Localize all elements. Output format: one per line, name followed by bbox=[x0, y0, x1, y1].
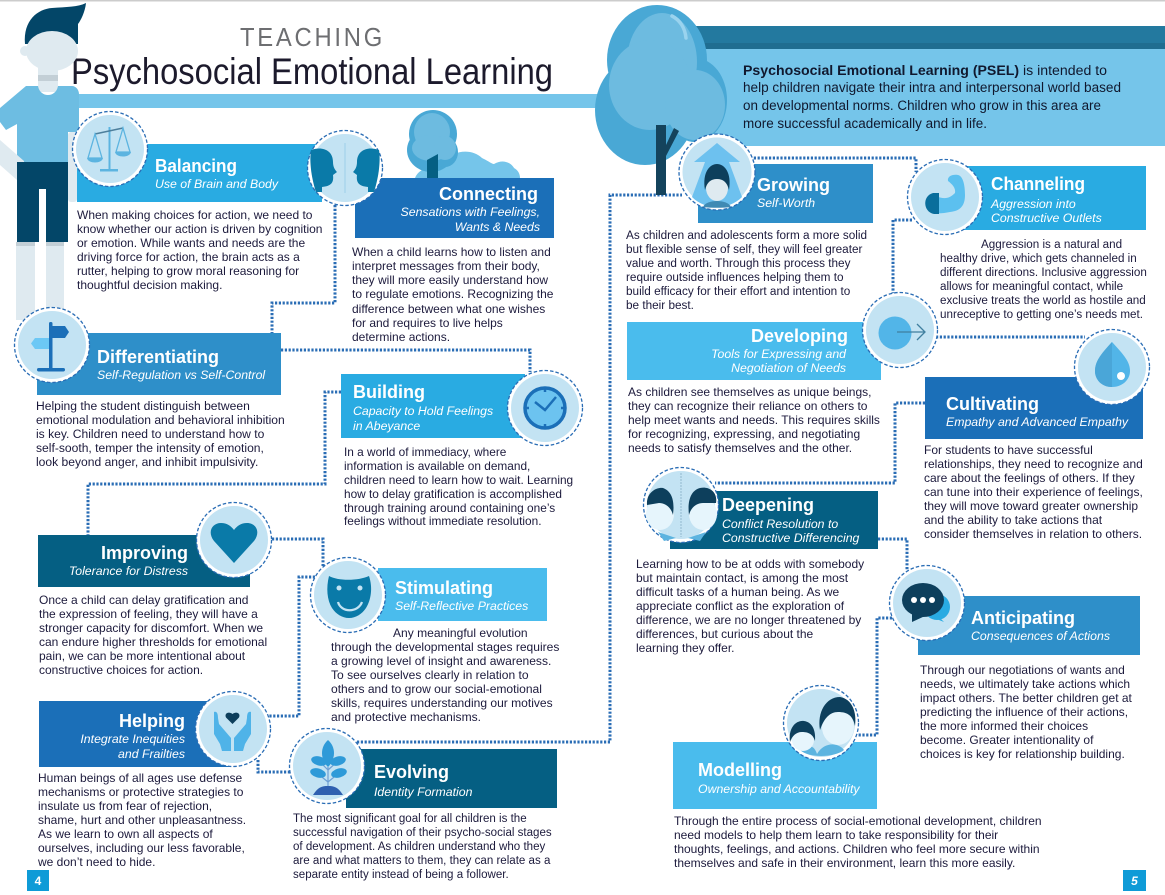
text block: Human beings of all ages use defense bbox=[38, 771, 242, 785]
text block: Helping the student distinguish between bbox=[36, 399, 250, 413]
subheading: Self-Regulation vs Self-Control bbox=[97, 368, 266, 382]
text block: exclusive treats the world as hostile and bbox=[940, 294, 1146, 307]
icon: water drop bbox=[1074, 330, 1150, 404]
text block: different directions. Inclusive aggression bbox=[940, 266, 1147, 279]
icon: flexed arm bbox=[908, 160, 982, 234]
text block: are and what matters to them, they can relate as a bbox=[293, 855, 551, 867]
connector lines bbox=[88, 158, 1085, 772]
text block: and protective mechanisms. bbox=[331, 710, 481, 724]
text block: stronger capacity for discomfort. When we bbox=[39, 621, 263, 635]
icon: signpost bbox=[14, 308, 90, 382]
heading: Improving bbox=[101, 543, 188, 563]
text block: through training around containing one’s bbox=[344, 501, 555, 515]
text block: Aggression is a natural and bbox=[981, 238, 1122, 251]
text block: insulate us from fear of rejection, bbox=[38, 799, 212, 813]
heading: Anticipating bbox=[971, 608, 1075, 628]
text block: To see ourselves clearly in relation to bbox=[331, 668, 529, 682]
text block: pain, we can be more intentional about bbox=[39, 649, 246, 663]
text block: to regulate emotions. Recognizing the bbox=[352, 287, 554, 301]
section: Stimulating bbox=[310, 558, 559, 724]
text block: learning they offer. bbox=[636, 641, 735, 655]
text block: shame, hurt and other unpleasantness. bbox=[38, 813, 246, 827]
subheading: Ownership and Accountability bbox=[698, 782, 860, 796]
text block: help meet wants and needs. This requires skills bbox=[628, 413, 880, 427]
text block: needs, we ultimately take actions which bbox=[920, 677, 1130, 691]
subheading: Integrate Inequities bbox=[80, 732, 185, 746]
icon: parent and child bbox=[784, 686, 858, 760]
heading: Balancing bbox=[155, 156, 237, 176]
text block: and the ability to take actions that bbox=[924, 513, 1103, 527]
subheading: Constructive Outlets bbox=[991, 211, 1102, 225]
icon: circle with arrow bbox=[862, 292, 938, 368]
icon: boy with upward arrow bbox=[679, 134, 755, 210]
icon: smiling mask bbox=[310, 558, 386, 632]
text block: Any meaningful evolution bbox=[393, 626, 528, 640]
subheading: Use of Brain and Body bbox=[155, 177, 279, 191]
title: TEACHING bbox=[240, 22, 385, 52]
icon: heart bbox=[196, 502, 272, 578]
section: Differentiating bbox=[14, 308, 285, 469]
text block: they will move toward greater ownership bbox=[924, 499, 1138, 513]
text block: emotional modulation and behavioral inhibition bbox=[36, 413, 285, 427]
text block: how to delay gratification is accomplished bbox=[344, 487, 562, 501]
text block: The most significant goal for all children is the bbox=[293, 813, 527, 825]
heading: Evolving bbox=[374, 762, 449, 782]
subheading: Sensations with Feelings, bbox=[401, 205, 540, 219]
text block: As we learn to own all aspects of bbox=[38, 827, 213, 841]
text block: separate entity instead of being a follower. bbox=[293, 869, 509, 881]
text block: children need to learn how to wait. Learning bbox=[344, 473, 573, 487]
subheading: Aggression into bbox=[990, 197, 1076, 211]
text block: information is available on demand, bbox=[344, 459, 530, 473]
text block: When making choices for action, we need to bbox=[77, 208, 313, 222]
icon: scales bbox=[72, 112, 148, 186]
text block: feelings without immediate resolution. bbox=[344, 514, 542, 528]
text block: successful navigation of their psycho-social stages bbox=[293, 827, 552, 839]
heading: Stimulating bbox=[395, 578, 493, 598]
section: Cultivating bbox=[924, 330, 1150, 541]
page number 5 bbox=[1123, 870, 1146, 891]
text block: the more informed their choices bbox=[920, 719, 1088, 733]
subheading: and Frailties bbox=[118, 747, 185, 761]
page number 4: 4 bbox=[35, 874, 42, 888]
text block: build efficacy for their effort and intention to bbox=[626, 285, 851, 298]
section: Helping bbox=[37, 692, 270, 869]
icon: speech bubbles bbox=[890, 566, 964, 640]
text block: a growing level of insight and awareness. bbox=[331, 654, 551, 668]
text block: Through the entire process of social-emotional development, children bbox=[674, 814, 1042, 828]
text block: In a world of immediacy, where bbox=[344, 445, 507, 459]
text block: thoughtful decision making. bbox=[77, 278, 222, 292]
text block: Once a child can delay gratification and bbox=[39, 593, 248, 607]
text block: know whether our action is driven by cognition bbox=[77, 222, 322, 236]
intro panel: PSEL: more successful academically and in life. bbox=[743, 116, 987, 131]
section: Deepening bbox=[636, 468, 878, 655]
heading: Modelling bbox=[698, 760, 782, 780]
subheading: Tools for Expressing and bbox=[711, 347, 847, 361]
text block: self-sooth, temper the intensity of emotion, bbox=[36, 441, 264, 455]
text block: ourselves, including our less favorable, bbox=[38, 841, 245, 855]
subheading: Consequences of Actions bbox=[971, 629, 1110, 643]
heading: Channeling bbox=[991, 174, 1085, 194]
text block: through the developmental stages requires bbox=[331, 640, 559, 654]
text block: the expression of feeling, they will have a bbox=[39, 607, 258, 621]
section: Growing bbox=[626, 134, 873, 312]
subheading: Constructive Differencing bbox=[722, 531, 860, 545]
text block: impact others. The better children get at bbox=[920, 691, 1133, 705]
page number 5: 5 bbox=[1131, 874, 1138, 888]
page number 4 bbox=[27, 870, 49, 891]
text block: consider themselves in relation to others. bbox=[924, 527, 1142, 541]
text block: differences, but curious about the bbox=[636, 627, 814, 641]
text block: difficult tasks of a human being. As we bbox=[636, 585, 840, 599]
section: Channeling bbox=[908, 160, 1147, 321]
text block: they can recognize their reliance on others to bbox=[628, 399, 868, 413]
text block: difference, we are no longer threatened by bbox=[636, 613, 861, 627]
text block: rutter, helping to grow moral reasoning for bbox=[77, 264, 299, 278]
icon: sprouting plant bbox=[290, 728, 364, 804]
text block: healthy drive, which gets channeled in bbox=[940, 252, 1137, 265]
text block: themselves and safe in their environment, learn this more easily. bbox=[674, 856, 1015, 870]
title: Psychosocial Emotional Learning bbox=[71, 51, 553, 92]
text block: difference between what one wishes bbox=[352, 302, 545, 316]
subheading: Capacity to Hold Feelings bbox=[353, 404, 493, 418]
text block: choices is key for relationship building. bbox=[920, 747, 1125, 761]
subheading: in Abeyance bbox=[353, 419, 420, 433]
intro panel: PSEL bbox=[690, 26, 1165, 146]
section: Modelling bbox=[673, 686, 1042, 870]
text block: predicting the influence of their actions, bbox=[920, 705, 1128, 719]
text block: Learning how to be at odds with somebody bbox=[636, 557, 864, 571]
subheading: Conflict Resolution to bbox=[722, 517, 838, 531]
heading: Differentiating bbox=[97, 347, 219, 367]
heading: Growing bbox=[757, 175, 830, 195]
text block: care about the feelings of others. If they bbox=[924, 471, 1135, 485]
illustration: large tree bbox=[595, 5, 727, 195]
text block: be their best. bbox=[626, 299, 694, 312]
heading: Connecting bbox=[439, 184, 538, 204]
text block: constructive choices for action. bbox=[39, 663, 203, 677]
text block: For students to have successful bbox=[924, 443, 1093, 457]
text block: others and to grow our social-emotional bbox=[331, 682, 542, 696]
subheading: Tolerance for Distress bbox=[69, 564, 188, 578]
text block: they will more easily understand how bbox=[352, 273, 548, 287]
section: Balancing bbox=[72, 112, 322, 292]
intro panel: PSEL: on developmental norms. Children who grow in this area are bbox=[743, 98, 1101, 113]
text block: for and requires to live helps bbox=[352, 316, 503, 330]
text block: value and worth. Through this process they bbox=[626, 257, 851, 270]
subheading: Empathy and Advanced Empathy bbox=[946, 415, 1129, 429]
text block: driving force for action, the brain acts as a bbox=[77, 250, 300, 264]
subheading: Self-Reflective Practices bbox=[395, 599, 528, 613]
text block: skills, requires understanding our motives bbox=[331, 696, 553, 710]
text block: look beyond anger, and inhibit impulsivity. bbox=[36, 455, 258, 469]
text block: mechanisms or protective strategies to bbox=[38, 785, 244, 799]
text block: need models to help them learn to take responsibility for their bbox=[674, 828, 998, 842]
heading: Cultivating bbox=[946, 394, 1039, 414]
section: Improving bbox=[38, 502, 272, 677]
text block: As children and adolescents form a more solid bbox=[626, 229, 867, 242]
section: Connecting bbox=[308, 110, 554, 344]
text block: Through our negotiations of wants and bbox=[920, 663, 1125, 677]
text block: needs to satisfy themselves and the other. bbox=[628, 441, 852, 455]
intro panel: PSEL: help children navigate their intra and interpersonal world based bbox=[743, 80, 1121, 95]
subheading: Wants & Needs bbox=[455, 220, 540, 234]
text block: determine actions. bbox=[352, 330, 450, 344]
text block: interpret messages from their body, bbox=[352, 259, 540, 273]
text block: appreciate conflict as the exploration of bbox=[636, 599, 845, 613]
text block: allows for meaningful contact, while bbox=[940, 280, 1123, 293]
intro panel: PSEL: Psychosocial Emotional Learning (PSEL) is intended to bbox=[743, 63, 1107, 78]
text block: but flexible sense of self, they will feel greater bbox=[626, 243, 863, 256]
icon: two heads bbox=[308, 130, 382, 206]
text block: relationships, they need to recognize and bbox=[924, 457, 1143, 471]
text block: As children see themselves as unique beings, bbox=[628, 385, 871, 399]
heading band bbox=[75, 94, 605, 108]
subheading: Identity Formation bbox=[374, 785, 473, 799]
section: Anticipating bbox=[890, 566, 1140, 761]
section: Developing bbox=[627, 292, 938, 455]
subheading: Negotiation of Needs bbox=[731, 361, 846, 375]
icon: small tree and cloud bbox=[407, 110, 520, 178]
title bbox=[71, 22, 553, 92]
section: Evolving bbox=[290, 728, 557, 881]
text block: of development. As children understand who they bbox=[293, 841, 545, 853]
icon: two faces bbox=[644, 468, 718, 542]
text block: is key. Children need to understand how to bbox=[36, 427, 265, 441]
text block: can endure higher thresholds for emotional bbox=[39, 635, 267, 649]
section: Building bbox=[341, 370, 582, 528]
text block: unreceptive to getting one’s needs met. bbox=[940, 308, 1143, 321]
text block: or emotion. While wants and needs are the bbox=[77, 236, 305, 250]
text block: become. Greater intentionality of bbox=[920, 733, 1094, 747]
text block: but maintain contact, is among the most bbox=[636, 571, 849, 585]
icon: clock bbox=[508, 370, 582, 446]
icon: caring hands bbox=[196, 692, 270, 766]
text block: When a child learns how to listen and bbox=[352, 245, 551, 259]
heading: Helping bbox=[119, 711, 185, 731]
text block: can tune into their experience of feelings, bbox=[924, 485, 1143, 499]
text block: for recognizing, expressing, and negotiating bbox=[628, 427, 860, 441]
text block: require outside influences helping them to bbox=[626, 271, 844, 284]
text block: thoughts, feelings, and actions. Children who feel more secure within bbox=[674, 842, 1040, 856]
subheading: Self-Worth bbox=[757, 196, 815, 210]
heading: Building bbox=[353, 382, 425, 402]
illustration: standing boy bbox=[0, 3, 86, 320]
text block: we don’t need to hide. bbox=[37, 855, 155, 869]
heading: Developing bbox=[751, 326, 848, 346]
heading: Deepening bbox=[722, 495, 814, 515]
